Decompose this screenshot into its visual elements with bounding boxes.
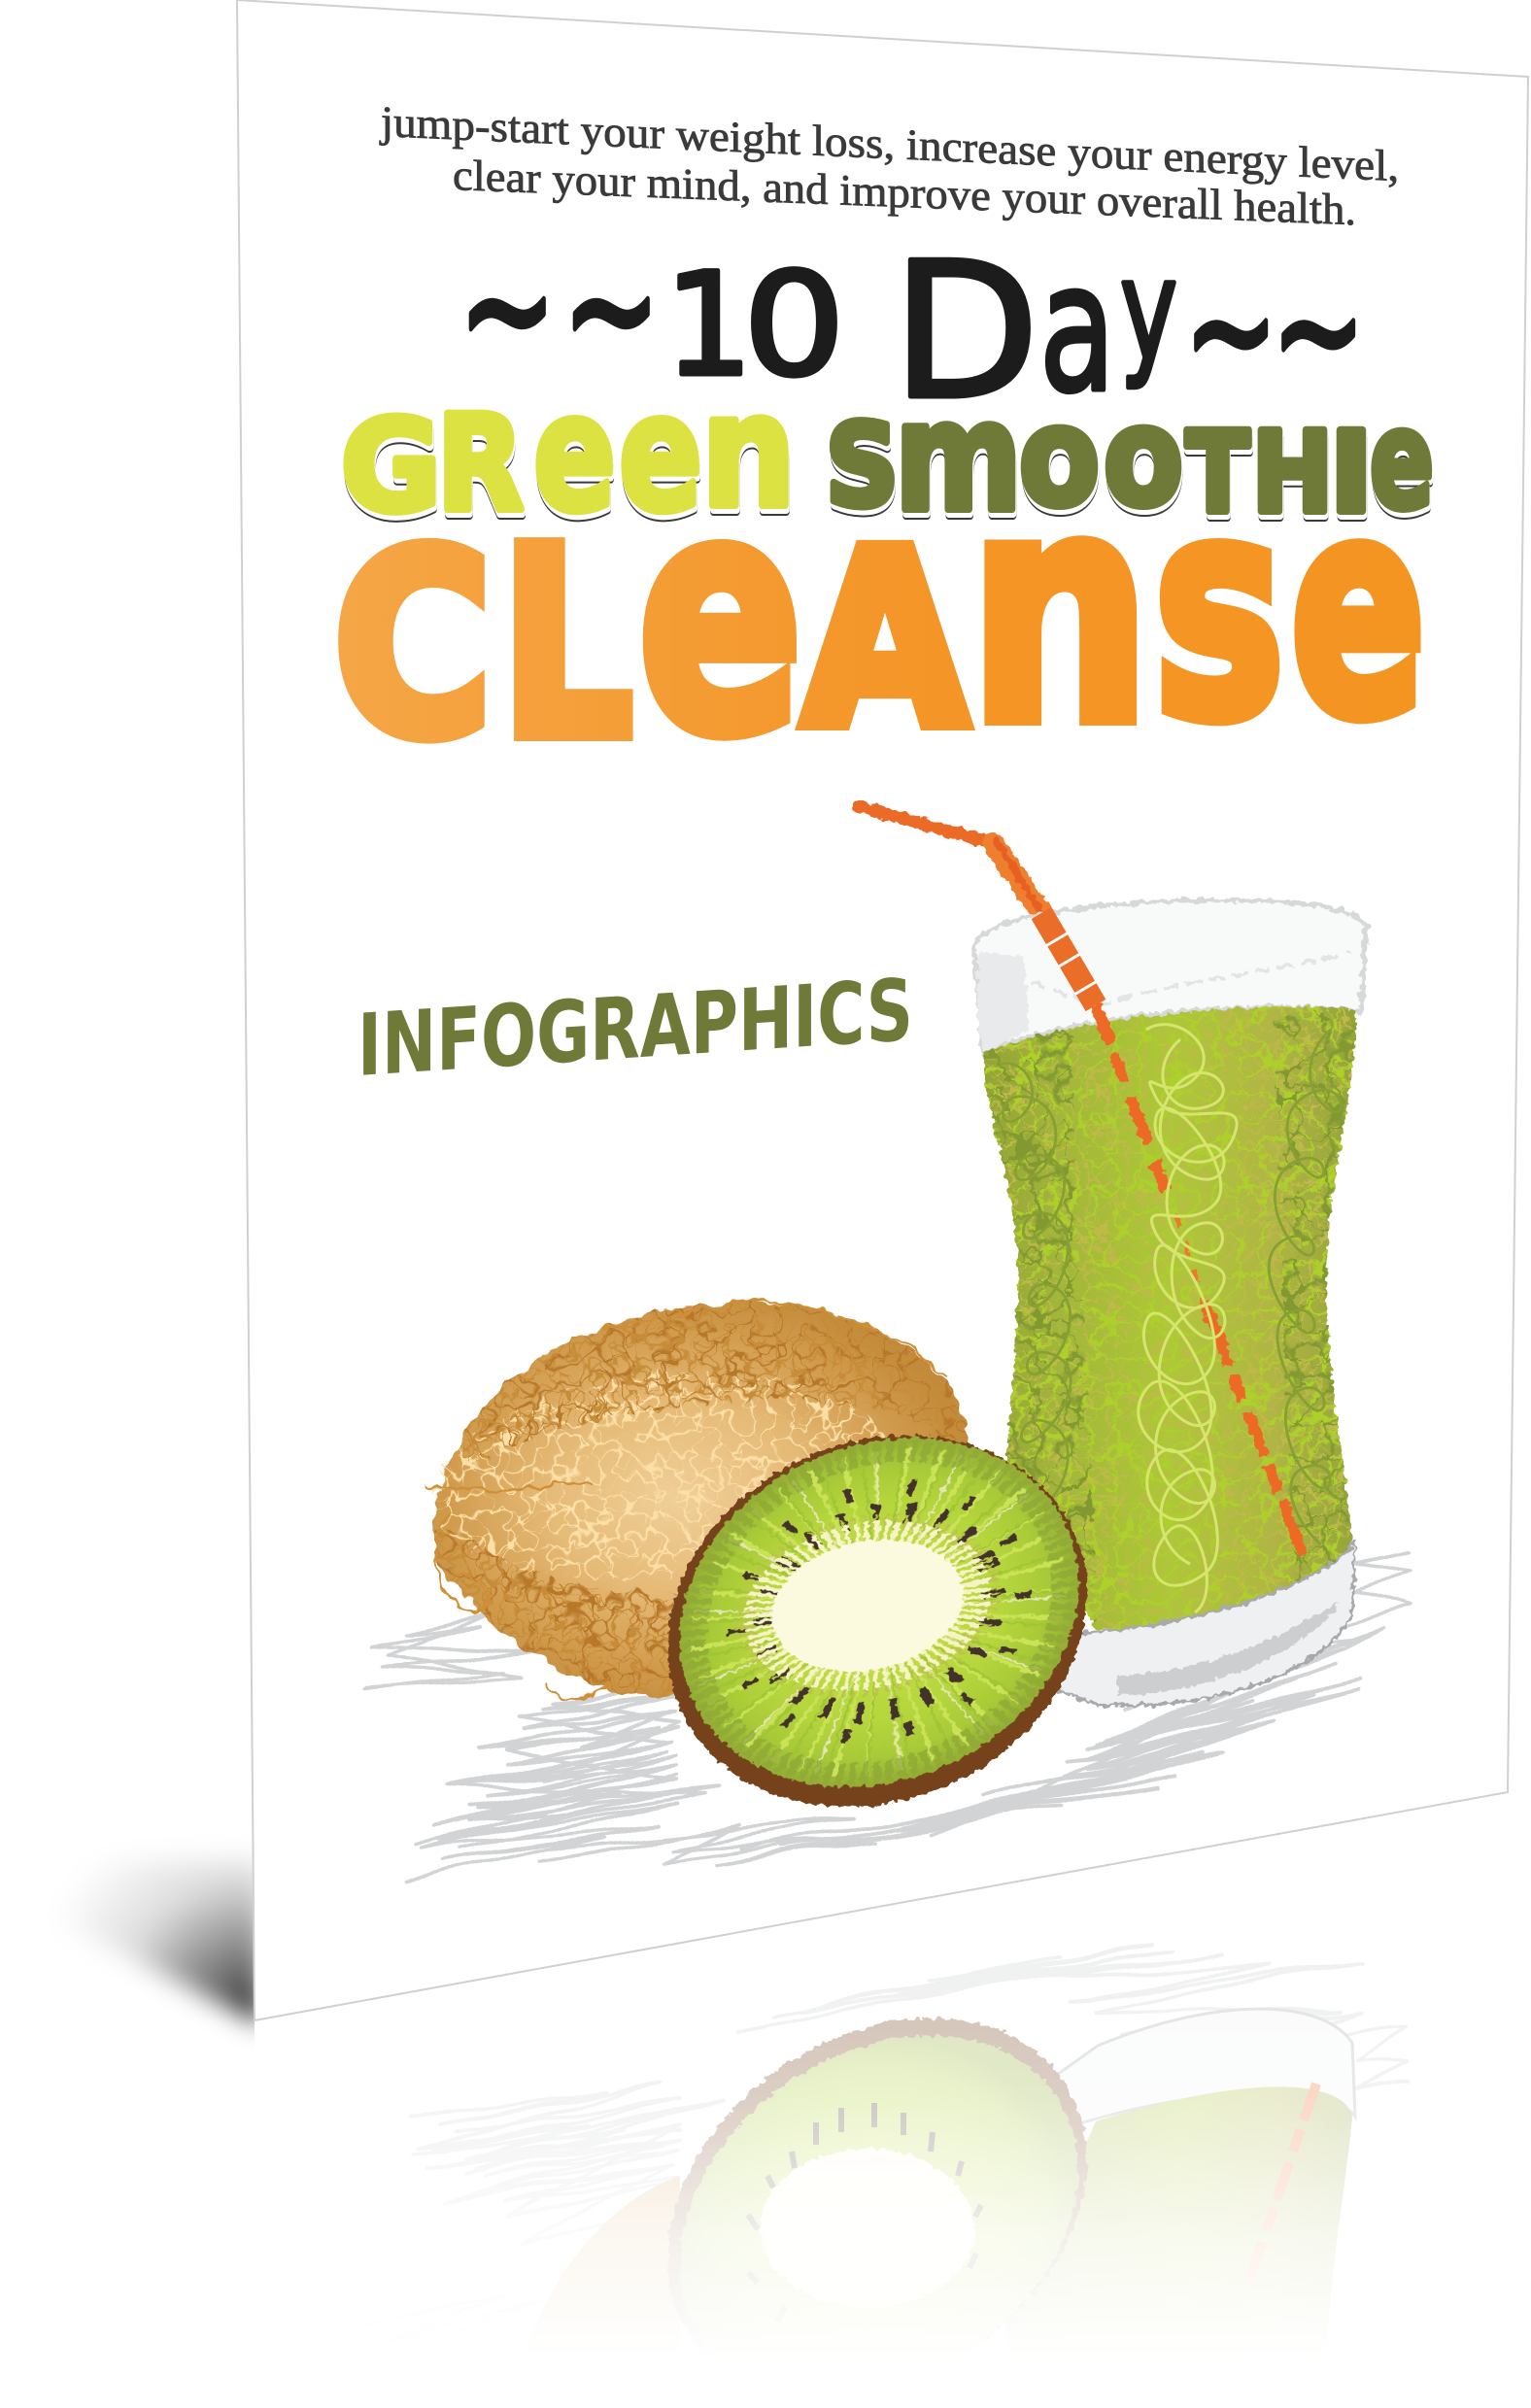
title: Green: e	[619, 360, 702, 548]
title: Smoothie: m	[895, 369, 1022, 545]
sketched ground shadow	[365, 1554, 1409, 1881]
title: Cleanse: A	[803, 501, 967, 780]
kiwi flesh	[622, 1374, 1137, 1850]
kiwi seeds	[695, 1441, 1064, 1783]
reflected glass base	[1030, 2009, 1355, 2128]
title: 10 Day: a	[1039, 225, 1115, 431]
title: 10 Day: ~~	[459, 208, 661, 411]
reflected ground scribbles	[408, 1943, 1410, 2161]
paper shadow	[82, 1853, 255, 2039]
title: Smoothie: e	[1370, 382, 1434, 540]
kiwi fuzz dark top	[460, 1301, 967, 1460]
title: Cleanse: e	[1291, 437, 1425, 782]
title: Cleanse: L	[501, 493, 632, 795]
reflected kiwi flesh	[680, 2034, 1080, 2280]
kiwi fuzz dark lower	[432, 1525, 753, 1695]
subtitle	[379, 97, 1399, 234]
icon: straw top	[859, 806, 1043, 915]
title: 10 Day: y	[1120, 229, 1177, 391]
illustration: kiwi and smoothie	[365, 806, 1409, 1881]
title: Cleanse: n	[970, 428, 1150, 792]
icon: kiwi half	[606, 1368, 1148, 1875]
title: 10 Day: 1	[664, 243, 753, 408]
title: Smoothie: o	[1104, 379, 1183, 537]
title: Smoothie: I	[1330, 408, 1373, 537]
heading: Infographics: INFOGRAPHICS	[357, 960, 913, 1096]
icon: smoothie glass	[974, 900, 1366, 1706]
paper sheet	[237, 0, 1528, 2020]
title: Green: n	[701, 360, 796, 542]
subtitle: clear your mind, and improve your overall health.	[453, 151, 1356, 234]
reflected kiwi half	[667, 2017, 1088, 2308]
kiwi skin	[432, 1301, 967, 1695]
title: Smoothie: T	[1186, 408, 1249, 537]
subtitle: jump-start your weight loss, increase your energy level,	[379, 97, 1399, 190]
dark side scribbles	[1001, 1030, 1342, 1544]
title: 10 Day	[459, 208, 1365, 441]
reflected kiwi seeds	[746, 2103, 983, 2285]
title: Green: e	[533, 360, 616, 548]
reflected kiwi rim	[667, 2017, 1088, 2308]
kiwi rim	[606, 1368, 1148, 1875]
reflected straw	[1267, 2083, 1321, 2215]
kiwi core	[729, 1500, 1006, 1712]
title: Smoothie: S	[826, 399, 899, 532]
pale scribble highlight	[1139, 1025, 1237, 1612]
title: Smoothie: o	[1019, 379, 1100, 537]
straw inside rim	[1041, 913, 1096, 1005]
glass rim	[974, 900, 1366, 1053]
straw through liquid	[1096, 1005, 1316, 1588]
title: Cleanse: C	[334, 500, 492, 793]
kiwi fuzz dark lower second layer	[432, 1525, 753, 1695]
reflected kiwi core	[761, 2149, 974, 2308]
title: 10 Day: D	[892, 222, 1039, 441]
smoothie liquid	[983, 1007, 1356, 1630]
reflected whole kiwi	[557, 2176, 680, 2285]
flesh rays	[758, 1500, 1001, 1725]
title: 10 Day: 0	[743, 243, 845, 408]
title: Smoothie: H	[1252, 408, 1333, 537]
kiwi loose hairs	[427, 1298, 947, 1701]
title: Cleanse: e	[638, 427, 802, 805]
title: 10 Day: ~~	[1184, 232, 1365, 427]
kiwi fuzz light	[423, 1351, 899, 1602]
title: Green: G	[341, 392, 441, 540]
reflected liquid	[1026, 2086, 1352, 2302]
icon: whole kiwi	[423, 1298, 967, 1701]
title: Green: R	[437, 388, 524, 540]
title: Cleanse: s	[1154, 435, 1284, 785]
reflection of illustration	[408, 1943, 1410, 2308]
kiwi fuzz dark top second layer	[460, 1301, 967, 1460]
glass base	[1030, 1541, 1355, 1706]
